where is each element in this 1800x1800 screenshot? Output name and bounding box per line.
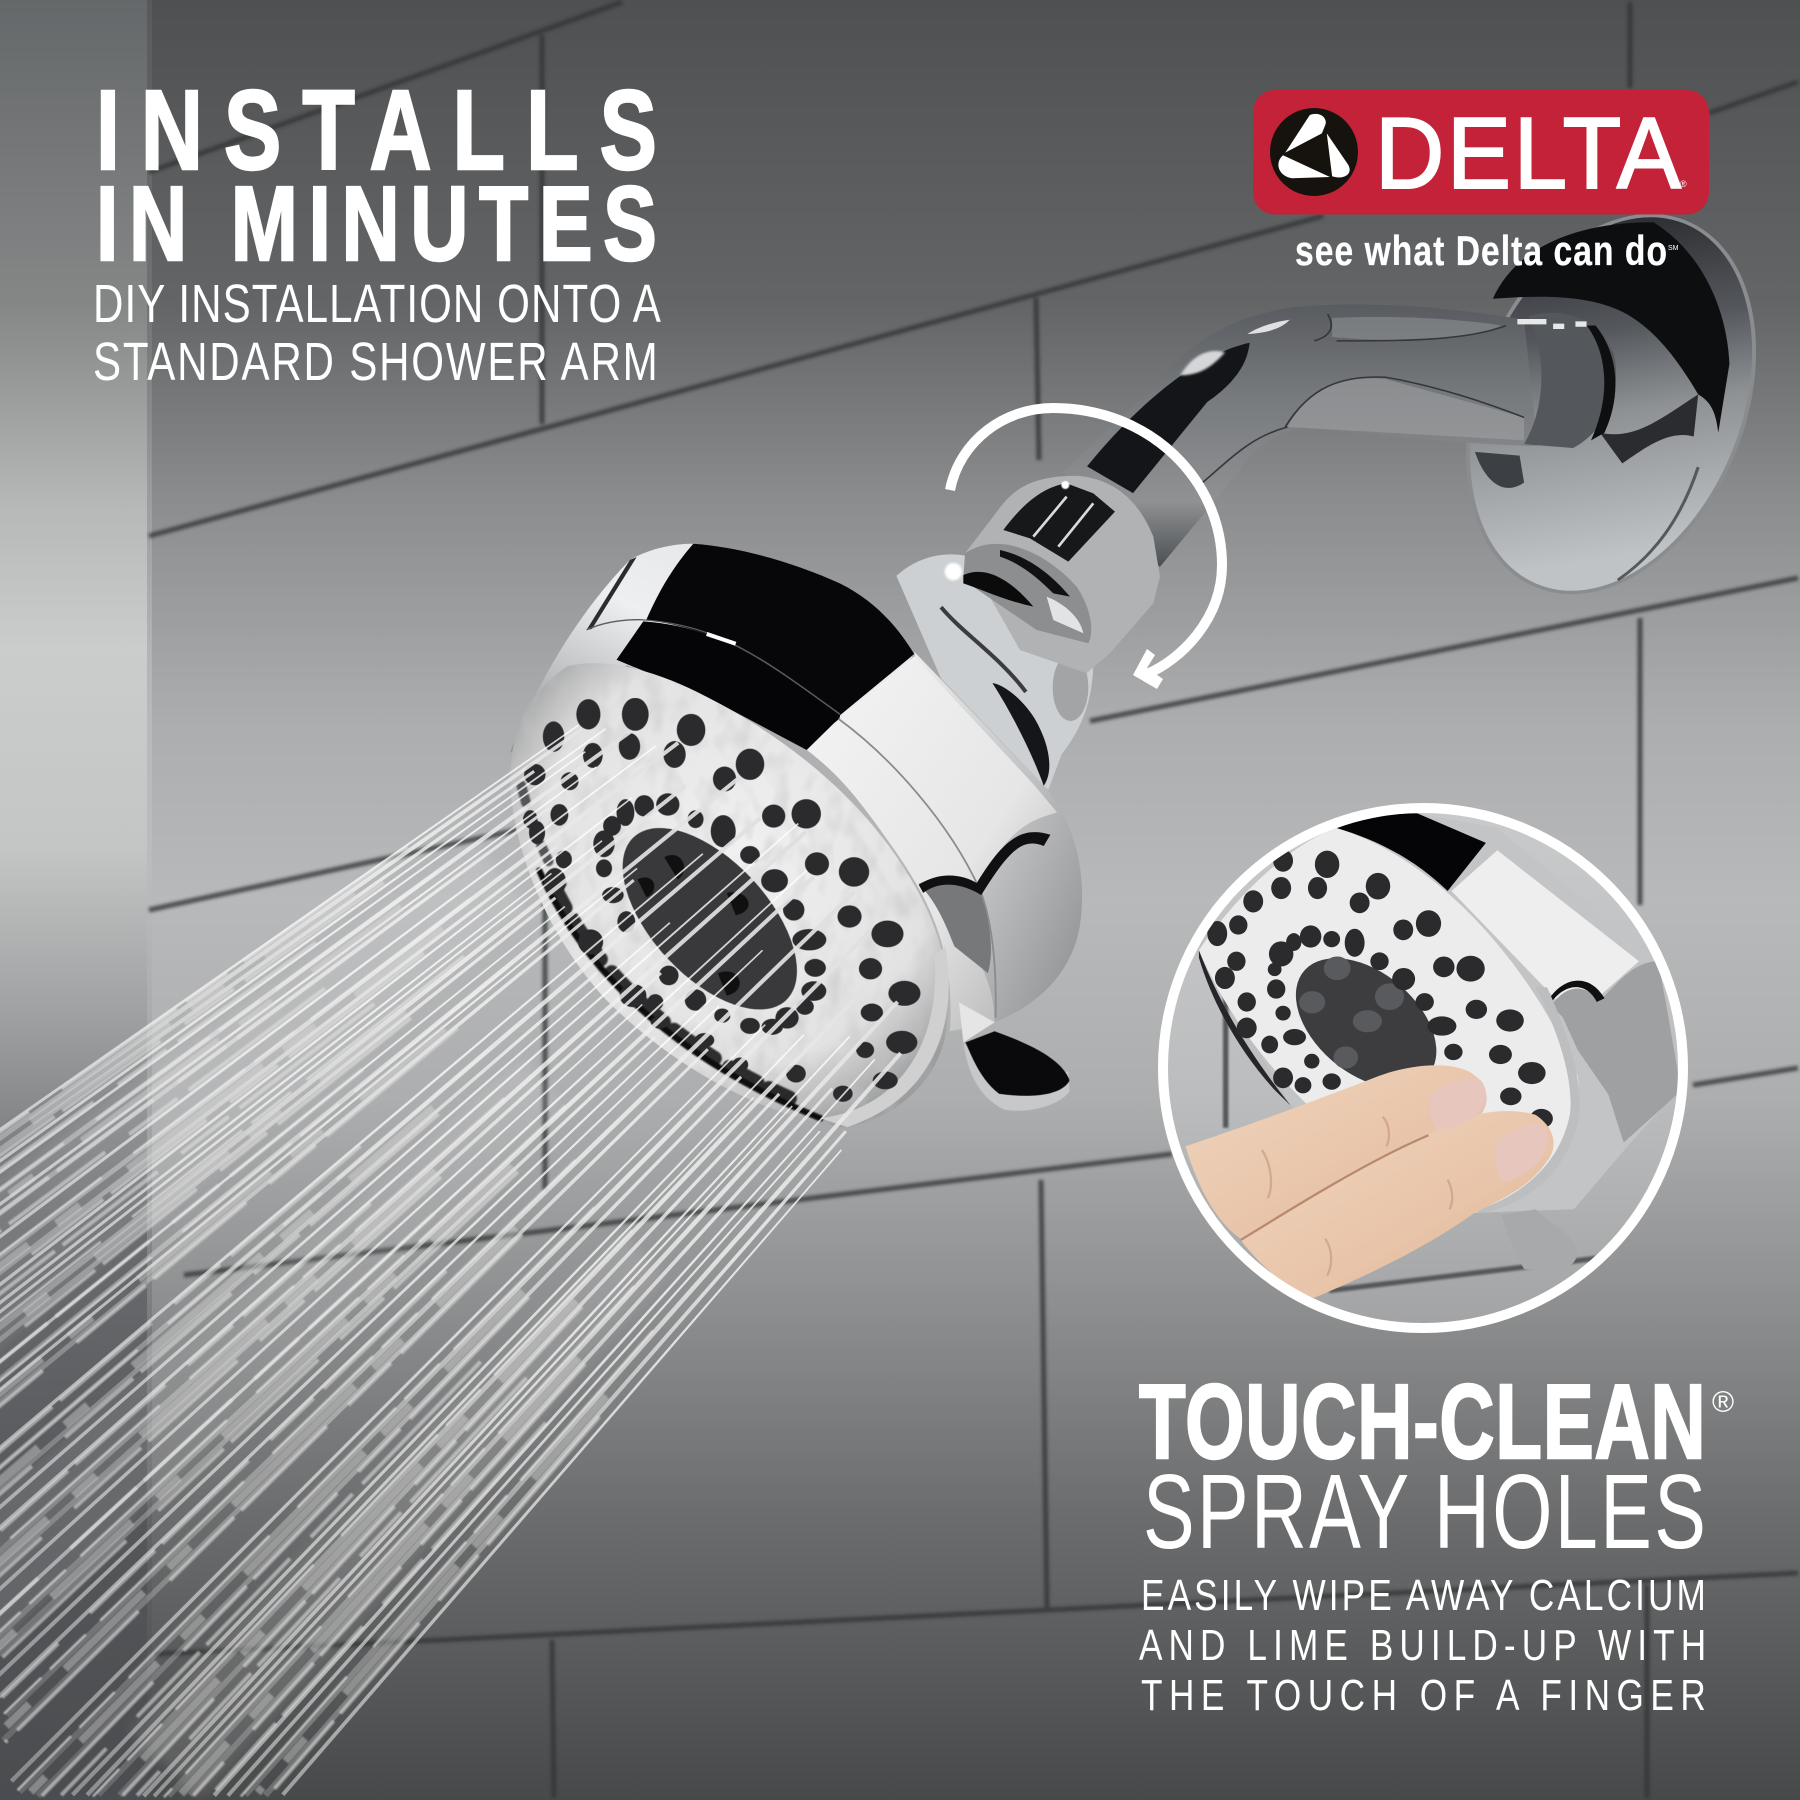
inset hub	[1296, 958, 1436, 1082]
collar knurl	[1003, 483, 1115, 562]
subhead: DIY INSTALLATION ONTO A	[93, 274, 661, 334]
feature title: TOUCH-CLEAN	[1139, 1362, 1706, 1481]
headline: INSTALLS	[96, 68, 657, 194]
logo mark	[1270, 108, 1358, 196]
spray holes	[523, 698, 921, 1102]
subhead: STANDARD SHOWER ARM	[93, 332, 658, 392]
water spray	[0, 723, 903, 1800]
swivel collar and neck	[945, 476, 1160, 673]
curved arm	[1063, 304, 1537, 567]
inset lever	[1521, 1209, 1576, 1270]
selector lever	[959, 1002, 1070, 1111]
Delta logo: ®	[1680, 179, 1687, 189]
ball joint	[963, 544, 1091, 643]
heading: installs in minutes	[93, 68, 661, 392]
inset ring	[1163, 808, 1683, 1328]
wall flange	[1420, 187, 1800, 621]
inset holes	[1207, 850, 1553, 1128]
inset: finger cleaning spray holes	[1158, 803, 1688, 1333]
rotation arrow	[950, 408, 1222, 689]
feature description: EASILY WIPE AWAY CALCIUM	[1141, 1571, 1706, 1620]
dark rim reflections	[521, 786, 821, 1118]
feature description: THE TOUCH OF A FINGER	[1141, 1671, 1706, 1720]
inset face plate	[1199, 828, 1579, 1213]
headline: IN MINUTES	[96, 164, 657, 283]
shower arm and wall flange	[1063, 187, 1800, 621]
Delta logo: SM	[1668, 245, 1679, 252]
dome back	[914, 652, 1082, 1022]
broken streaks	[0, 847, 653, 1797]
subhead	[93, 274, 661, 392]
Delta logo	[1253, 90, 1709, 275]
inset tile lines	[1222, 996, 1597, 1294]
centre hub	[591, 798, 828, 1040]
feature description: AND LIME BUILD-UP WITH	[1139, 1621, 1706, 1670]
fingers	[1185, 1065, 1554, 1298]
soft spray haze	[0, 822, 679, 1800]
heading: touch-clean spray holes	[1139, 1362, 1734, 1720]
neck base	[896, 554, 1093, 790]
shower head	[510, 544, 1093, 1127]
face plate	[510, 663, 948, 1127]
wordmark: DELTA	[1375, 97, 1681, 210]
arm contour reflections	[1203, 314, 1524, 482]
chrome bezel	[807, 656, 1057, 1031]
main jets from nozzles	[0, 727, 903, 1798]
arm collar at flange	[1524, 313, 1616, 448]
inset photo	[1168, 813, 1678, 1323]
headline	[96, 68, 657, 283]
tagline: see what Delta can do	[1295, 229, 1667, 275]
feature subtitle: SPRAY HOLES	[1143, 1452, 1706, 1571]
chrome swirl texture	[510, 663, 948, 1127]
inset head body	[1290, 1102, 1659, 1213]
heading: touch-clean spray holes: ®	[1712, 1386, 1734, 1419]
feature description	[1139, 1571, 1706, 1720]
thin jets	[0, 723, 876, 1798]
upper cylinder	[510, 544, 914, 753]
